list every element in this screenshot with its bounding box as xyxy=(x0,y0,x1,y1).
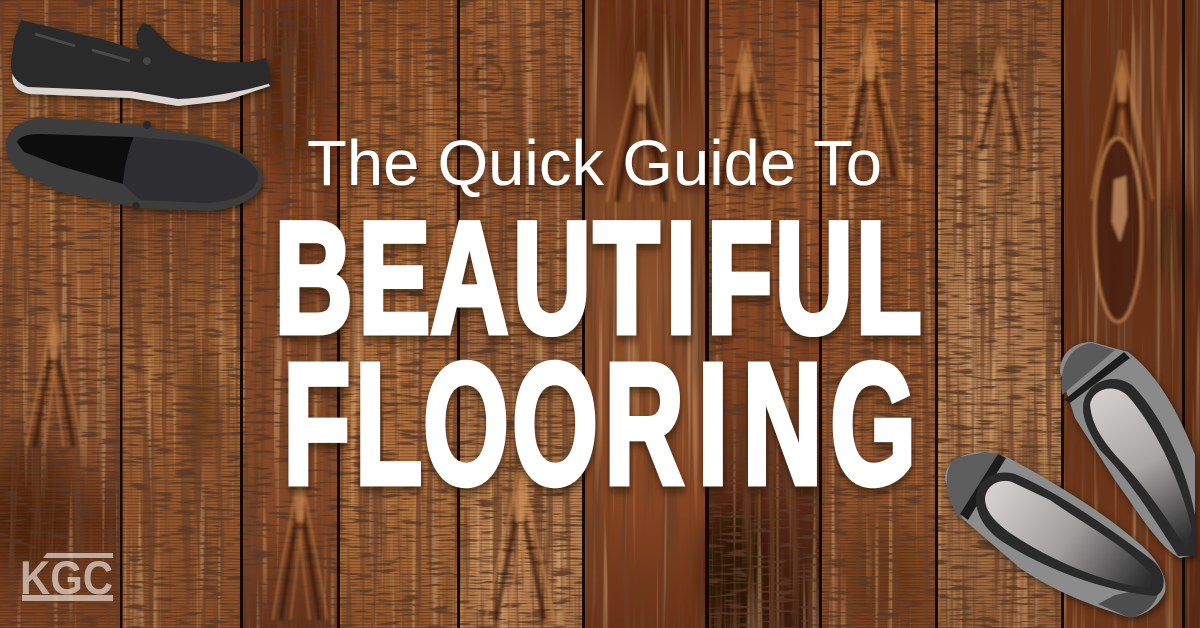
title: FLOORING: FLOORING xyxy=(283,327,916,520)
icon: black loafer top view xyxy=(6,118,263,211)
subtitle: The Quick Guide To: The Quick Guide To xyxy=(307,127,882,199)
title: BEAUTIFUL: BEAUTIFUL xyxy=(275,189,922,366)
icon: grey ballet flat right xyxy=(1060,342,1195,558)
icon: black loafer side view xyxy=(11,20,271,106)
logo: KGC: KGC xyxy=(20,551,113,604)
icon: grey ballet flat left xyxy=(945,452,1166,617)
